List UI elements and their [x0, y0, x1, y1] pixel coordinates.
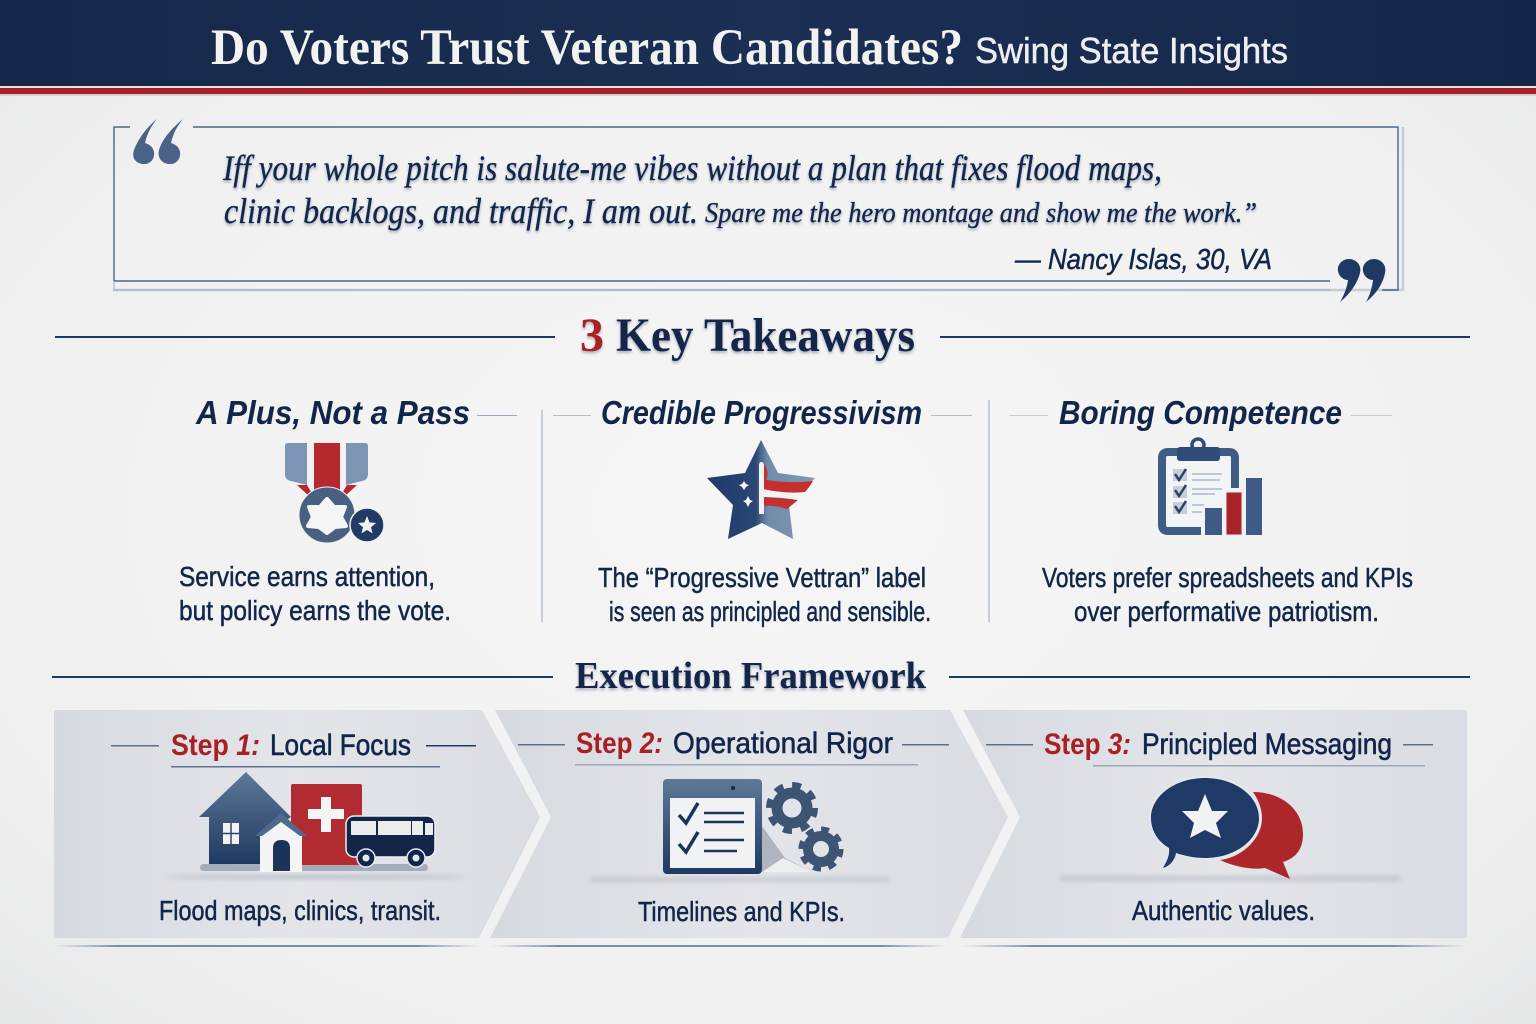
step heading — [518, 727, 949, 766]
quote text: clinic backlogs, and traffic, I am out. — [224, 191, 698, 231]
attribution: — Nancy Islas, 30, VA — [1014, 244, 1272, 276]
step heading: Step 2: — [576, 727, 663, 760]
body text: but policy earns the vote. — [179, 595, 451, 626]
body text: over performative patriotism. — [1074, 596, 1379, 627]
panel: Boring Competence — [1010, 394, 1413, 627]
panel: Credible Progressivism — [553, 394, 972, 627]
body text — [179, 561, 451, 626]
icon: closing quote mark — [1338, 259, 1385, 302]
heading: Boring Competence — [1059, 394, 1342, 431]
step heading: Local Focus — [270, 729, 411, 762]
quote text: Spare me the hero montage and show me the work.” — [705, 197, 1257, 229]
column dividers — [542, 400, 990, 622]
caption: Timelines and KPIs. — [638, 896, 845, 927]
icon: patriotic star — [707, 440, 815, 539]
section heading: 3 Key Takeaways: Key Takeaways — [616, 309, 915, 362]
caption: Flood maps, clinics, transit. — [159, 895, 441, 926]
step heading: Step 1: — [171, 729, 260, 762]
panel: Step 1 Local Focus — [54, 710, 540, 947]
step heading — [986, 728, 1433, 766]
heading: A Plus, Not a Pass — [195, 394, 470, 431]
body text: Service earns attention, — [179, 561, 435, 592]
step heading: Step 3: — [1044, 728, 1131, 761]
caption: Authentic values. — [1132, 895, 1315, 926]
section heading: 3 Key Takeaways — [55, 309, 1470, 362]
icon: checklist and gears — [590, 779, 890, 882]
body text: The “Progressive Vettran” label — [598, 562, 926, 593]
step heading: Operational Rigor — [673, 727, 893, 760]
body text: Voters prefer spreadsheets and KPIs — [1042, 562, 1413, 593]
panel: Step 2 Operational Rigor — [490, 710, 1008, 947]
step heading: Principled Messaging — [1142, 728, 1392, 761]
body text: is seen as principled and sensible. — [609, 596, 931, 627]
icon: house, clinic and bus — [165, 772, 465, 880]
quote text: Iff your whole pitch is salute-me vibes without a plan that fixes flood maps, — [222, 148, 1162, 188]
panel: Step 3 Principled Messaging — [960, 710, 1467, 947]
step heading — [111, 729, 476, 768]
icon: clipboard with bar chart — [1162, 439, 1262, 535]
icon: speech bubbles with star — [1060, 776, 1400, 881]
section heading: Execution Framework: Execution Framework — [575, 655, 927, 697]
quote panel — [113, 119, 1403, 302]
icon: opening quote mark — [133, 119, 183, 164]
body text — [1042, 562, 1413, 627]
title: Do Voters Trust Veteran Candidates? — [211, 20, 963, 76]
icon: medal — [285, 443, 384, 543]
subtitle: Swing State Insights — [975, 30, 1288, 71]
header banner — [0, 0, 1536, 96]
section heading: 3 Key Takeaways: 3 — [580, 309, 604, 362]
heading: Credible Progressivism — [601, 394, 922, 431]
panel: A Plus, Not a Pass — [179, 394, 517, 626]
body text — [598, 562, 931, 627]
quote text — [222, 148, 1257, 231]
